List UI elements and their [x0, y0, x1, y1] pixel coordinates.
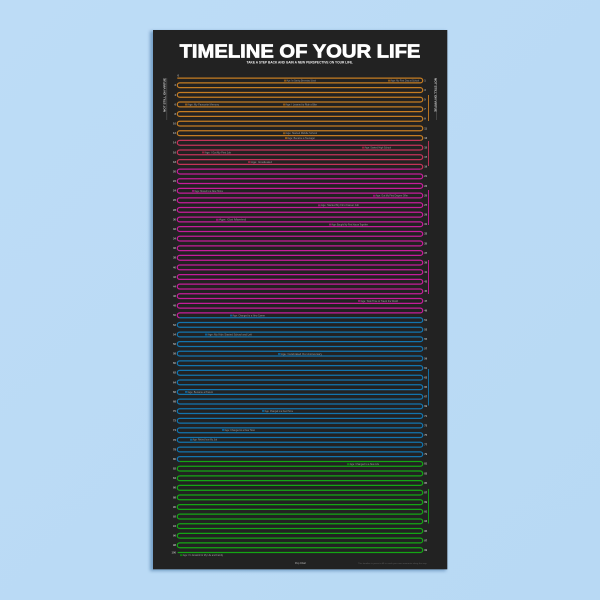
right age numbers: 43: [424, 280, 428, 284]
right age numbers: 27: [424, 203, 428, 207]
right age numbers: 5: [424, 98, 426, 102]
left age numbers: 88: [173, 495, 176, 499]
right age numbers: 73: [424, 423, 428, 427]
left age numbers: 12: [173, 131, 176, 135]
right age numbers: 41: [424, 270, 428, 274]
event markers: midlife: Age: Became a Parent: [188, 391, 213, 394]
right age numbers: 13: [424, 136, 428, 140]
left age numbers: 30: [173, 217, 176, 221]
left age numbers: 6: [174, 102, 176, 106]
left age numbers: 74: [173, 428, 176, 432]
timeline snake: adulthood, magenta: [177, 169, 423, 318]
left age numbers: 54: [173, 332, 176, 336]
left age numbers: 64: [173, 380, 176, 384]
left age numbers: 66: [173, 390, 176, 394]
right age numbers: 49: [424, 308, 428, 312]
event markers: midlife: Age: My Kids Started School and Left: [208, 333, 252, 336]
right age numbers: 37: [424, 251, 428, 255]
left age numbers: 50: [173, 313, 176, 317]
right age numbers: 65: [424, 385, 428, 389]
right age numbers: 67: [424, 395, 428, 399]
event markers: childhood: Age: My Favourite Memory: [188, 103, 220, 106]
right age numbers: 23: [424, 184, 428, 188]
left age numbers: 26: [173, 198, 176, 202]
right age numbers: 63: [424, 376, 428, 380]
left age numbers: 34: [173, 236, 176, 240]
left age numbers: 24: [173, 189, 176, 193]
right age numbers: 21: [424, 174, 428, 178]
left age numbers: 10: [173, 122, 176, 126]
event markers: later life: Age: Changed to a New Life: [350, 463, 380, 466]
left age numbers: 20: [173, 170, 176, 174]
left age numbers: 90: [173, 505, 176, 509]
title: TIMELINE OF YOUR LIFE: [180, 41, 420, 61]
left age numbers: 68: [173, 399, 176, 403]
right age numbers: 89: [424, 500, 428, 504]
right age numbers: 7: [424, 107, 426, 111]
right age numbers: 99: [424, 548, 428, 552]
footer logo: Pop Chart: [295, 561, 306, 565]
event markers: midlife: Age: Celebrated Our Anniversary: [281, 353, 323, 356]
event markers: adulthood: Age: Started My First Career Job: [321, 204, 360, 207]
left age numbers: 56: [173, 342, 176, 346]
event markers: adulthood: Age: Moved to a New Home: [195, 190, 224, 193]
left age numbers: [172, 73, 180, 555]
right side caption: NOT STILL ON VIRTUE: [433, 78, 437, 112]
right age numbers: 61: [424, 366, 428, 370]
event markers: childhood: [185, 80, 419, 140]
life stage bars on the right edge: [427, 95, 430, 524]
right age numbers: 59: [424, 356, 428, 360]
left age numbers: 42: [173, 275, 176, 279]
event markers: teens: Age: Started High School: [365, 146, 391, 150]
event markers: midlife: [185, 314, 323, 442]
right age numbers: 85: [424, 481, 428, 485]
right age numbers: 97: [424, 538, 428, 542]
left age numbers: 84: [173, 476, 176, 480]
left age numbers: 4: [174, 93, 176, 97]
poster shadow: [150, 31, 446, 571]
right age numbers: 47: [424, 299, 428, 303]
left age numbers: 48: [173, 304, 176, 308]
subtitle: TAKE A STEP BACK AND GAIN A NEW PERSPECTIVE ON YOUR LIFE.: [246, 61, 353, 65]
left age numbers: 76: [173, 438, 176, 442]
left age numbers: 14: [173, 141, 176, 145]
timeline snake: childhood, orange: [177, 78, 423, 140]
left age numbers: 18: [173, 160, 176, 164]
timeline snake: midlife, blue: [177, 318, 423, 461]
left age numbers: 52: [173, 323, 176, 327]
event markers: adulthood: Age: Took Time to Travel the World: [361, 300, 399, 303]
panel: poster: [153, 30, 447, 569]
right age numbers: 87: [424, 490, 428, 494]
right age numbers: 35: [424, 241, 428, 245]
right age numbers: 75: [424, 433, 428, 437]
right age numbers: 91: [424, 510, 428, 514]
right age numbers: [424, 78, 428, 552]
left age numbers: 72: [173, 419, 176, 423]
event markers: later life: Age: I'm Grateful for My Life and Family: [183, 554, 224, 557]
left age numbers: 60: [173, 361, 176, 365]
left age numbers: 22: [173, 179, 176, 183]
event markers: childhood: Age: Started Middle School: [286, 132, 317, 135]
right age numbers: 19: [424, 165, 428, 169]
right age numbers: 3: [424, 88, 426, 92]
right age numbers: 11: [424, 126, 428, 130]
right age numbers: 33: [424, 232, 428, 236]
left age numbers: 28: [173, 208, 176, 212]
left age numbers: 16: [173, 150, 176, 154]
event markers: teens: [202, 146, 391, 164]
right age numbers: 79: [424, 452, 428, 456]
left age numbers: 94: [173, 524, 176, 528]
left age numbers: 82: [173, 466, 176, 470]
right age numbers: 93: [424, 519, 428, 523]
right age numbers: 9: [424, 117, 426, 121]
right age numbers: 39: [424, 260, 428, 264]
right age numbers: 71: [424, 414, 428, 418]
right age numbers: 95: [424, 529, 428, 533]
left age numbers: 46: [173, 294, 176, 298]
event markers: childhood: Age: I'm Starting Elementary School: [287, 80, 316, 82]
event markers: adulthood: Age: Got Married: [219, 219, 247, 222]
left side caption: [162, 78, 167, 120]
footer fine print: This timeline is yours to fill in: mark your own moments along the way.: [358, 562, 428, 565]
left age numbers: 36: [173, 246, 176, 250]
right age numbers: 25: [424, 193, 428, 197]
event markers: adulthood: Age: Bought My First House Together: [332, 223, 368, 226]
timeline snake: later life, green: [177, 461, 423, 553]
event markers: childhood: Age: I Learned to Ride a Bike: [286, 103, 318, 106]
right age numbers: 81: [424, 462, 428, 466]
left age numbers: 8: [174, 112, 176, 116]
right age numbers: 55: [424, 337, 428, 341]
right age numbers: 15: [424, 146, 428, 150]
left age numbers: 32: [173, 227, 176, 231]
event markers: adulthood: Age: Got My First Degree Offer: [376, 195, 408, 198]
right age numbers: 31: [424, 222, 428, 226]
left age numbers: 92: [173, 514, 176, 518]
left age numbers: 96: [173, 534, 176, 538]
left age numbers: 62: [173, 371, 176, 375]
left age numbers: 2: [174, 83, 176, 87]
left age numbers: 40: [173, 265, 176, 269]
left age numbers: 86: [173, 486, 176, 490]
left age numbers: 38: [173, 256, 176, 260]
event markers: teens: Age: Graduated: [251, 161, 273, 164]
right age numbers: 57: [424, 347, 428, 351]
right age numbers: 29: [424, 213, 428, 217]
right age numbers: 17: [424, 155, 428, 159]
right age numbers: 83: [424, 471, 428, 475]
left age numbers: 44: [173, 284, 176, 288]
left age numbers: 70: [173, 409, 176, 413]
left age numbers: 98: [173, 543, 176, 547]
event markers: teens: Age: I Got My First Job: [205, 151, 232, 154]
right age numbers: 69: [424, 404, 428, 408]
left age numbers: 100: [172, 551, 177, 555]
event markers: childhood: Age: Became a Teenager: [288, 137, 315, 140]
left age numbers: 78: [173, 447, 176, 451]
event markers: childhood: Age: My First Day at School: [391, 80, 419, 82]
event markers: adulthood: [192, 190, 408, 303]
event markers: later life: [180, 463, 380, 557]
right age numbers: 51: [424, 318, 428, 322]
timeline snake: teens, red: [177, 140, 423, 169]
right age numbers: 53: [424, 328, 428, 332]
event markers: midlife: Age: Retired from My Job: [193, 439, 218, 442]
left age numbers: 0: [178, 73, 180, 77]
left age numbers: 58: [173, 352, 176, 356]
left age numbers: 80: [173, 457, 176, 461]
right age numbers: 45: [424, 289, 428, 293]
left side caption: NOT STILL ON VIRTUE: [162, 78, 166, 112]
event markers: midlife: Age: Changed to a New Home: [265, 410, 293, 413]
right age numbers: 1: [424, 78, 426, 82]
event markers: midlife: Age: Changed to a New Town: [225, 429, 256, 432]
event markers: midlife: Age: Changed to a New Career: [233, 314, 265, 317]
right age numbers: 77: [424, 443, 428, 447]
